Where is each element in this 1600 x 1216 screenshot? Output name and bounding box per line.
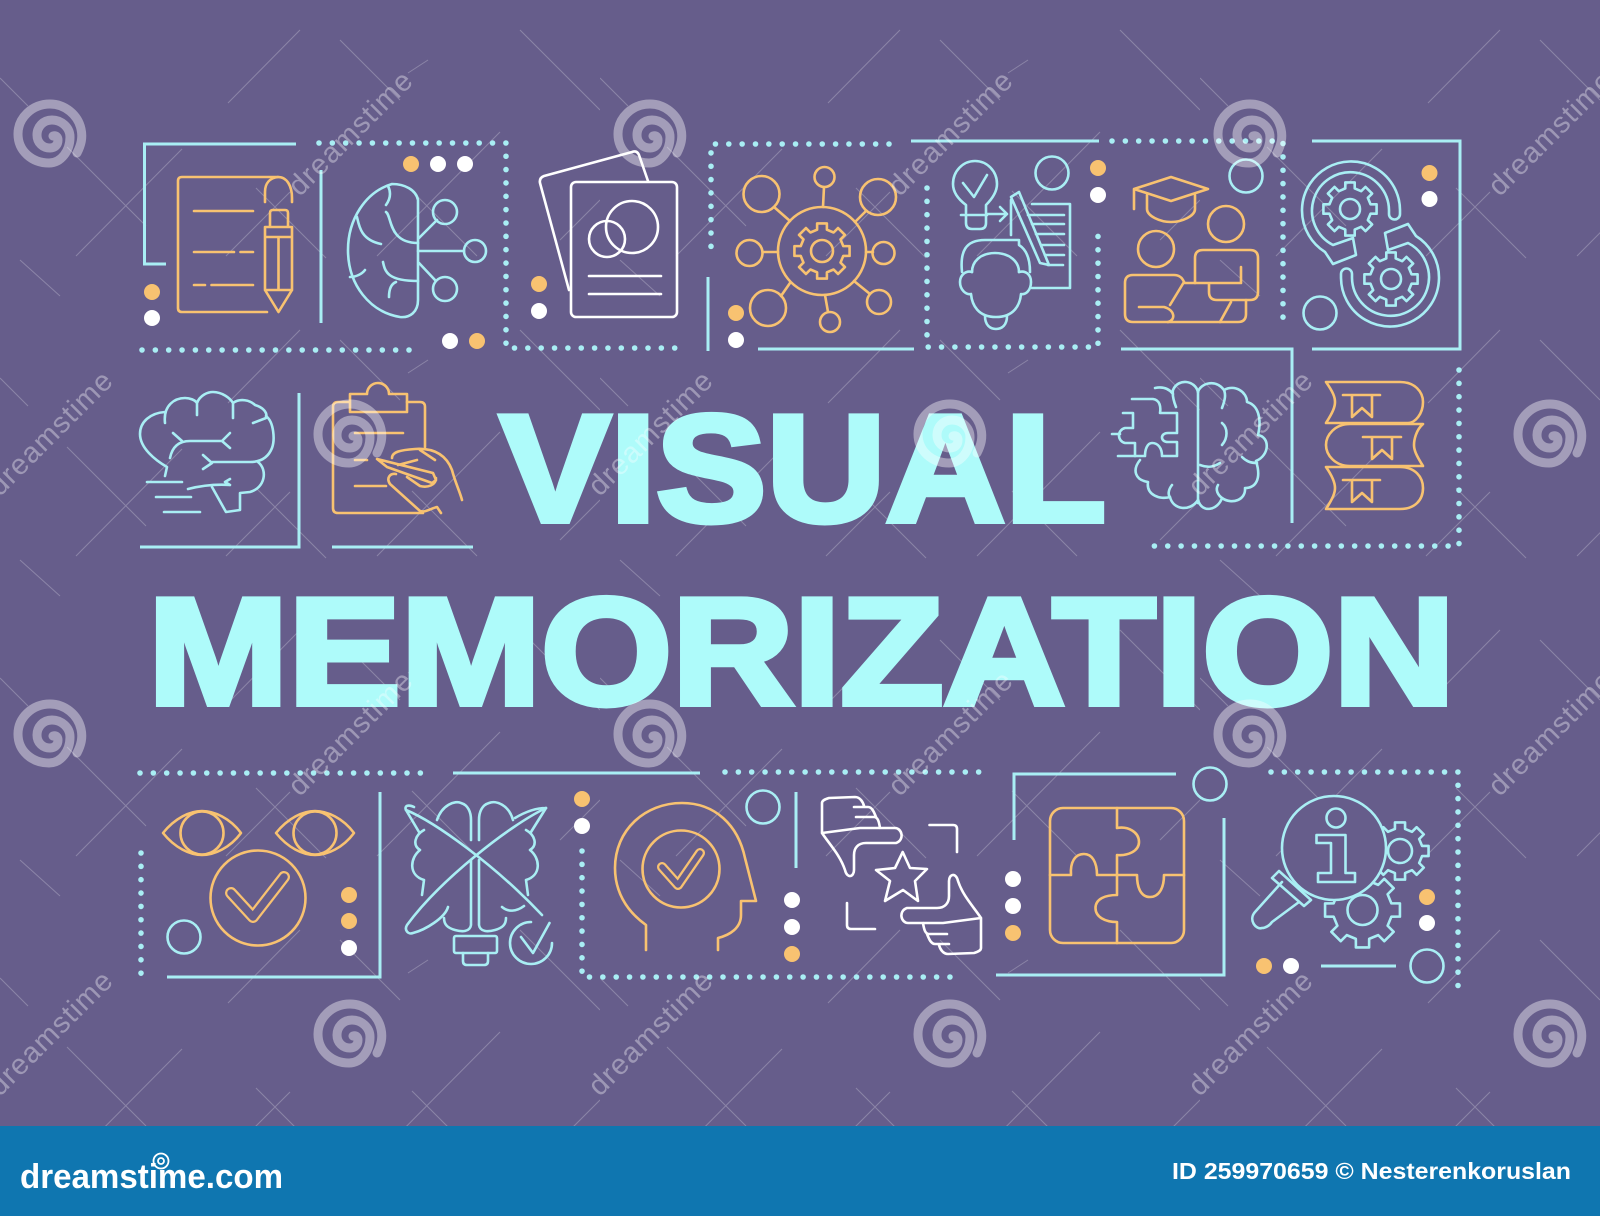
watermark text: dreamstime bbox=[282, 665, 419, 802]
icon: person with idea and notes bbox=[953, 156, 1070, 329]
watermark text: dreamstime bbox=[1182, 965, 1319, 1102]
footer bar bbox=[0, 1126, 1600, 1216]
watermark text: dreamstime bbox=[582, 365, 719, 502]
watermark spirals bbox=[18, 104, 1582, 1063]
footer logo spiral bbox=[154, 1154, 168, 1168]
decorative dots: top and bottom rows bbox=[144, 156, 1438, 974]
icon: cycle of two gears bbox=[1302, 161, 1439, 330]
image id and author credit: ID 259970659 © Nesterenkoruslan bbox=[1172, 1158, 1571, 1184]
icon: half brain with network nodes bbox=[348, 184, 486, 317]
watermark text: dreamstime bbox=[882, 65, 1019, 202]
icon: decorative circle near head bbox=[746, 790, 780, 824]
icon: eyes with check mark bbox=[163, 811, 354, 946]
title line: MEMORIZATION: MEMORIZATION bbox=[148, 567, 1455, 737]
icon: brain with puzzle piece bbox=[1112, 382, 1267, 509]
icon: decorative circle near eyes bbox=[168, 920, 200, 954]
icon: overlapping cards with circles bbox=[540, 151, 677, 317]
icon: scroll document with pencil bbox=[178, 177, 292, 312]
icon: head with check mark bbox=[615, 803, 756, 950]
icon: decorative circle near puzzle bbox=[1194, 768, 1226, 800]
icon: graduate teaching student bbox=[1125, 177, 1258, 322]
watermark text: dreamstime bbox=[1182, 365, 1319, 502]
watermark text: dreamstime bbox=[582, 965, 719, 1102]
icon: brain light bulb with crossed leaves and check bbox=[405, 802, 552, 965]
title bbox=[148, 384, 1455, 737]
icon: brain with speed lines bbox=[140, 392, 274, 512]
icon: decorative circle near graduate bbox=[1230, 160, 1262, 192]
icon: stack of books with bookmarks bbox=[1326, 382, 1423, 509]
footer logo text: dreamstime.com bbox=[20, 1158, 283, 1196]
icon: clipboard with writing hand bbox=[333, 383, 462, 513]
icon: magnifier with info and gears bbox=[1252, 796, 1444, 982]
icon: jigsaw puzzle bbox=[1050, 808, 1184, 943]
icon: gear hub network bbox=[736, 167, 896, 332]
title line: VISUAL: VISUAL bbox=[500, 384, 1106, 554]
icon: hands framing a star bbox=[822, 797, 981, 954]
watermark text: dreamstime bbox=[282, 65, 419, 202]
watermark text: dreamstime bbox=[882, 665, 1019, 802]
